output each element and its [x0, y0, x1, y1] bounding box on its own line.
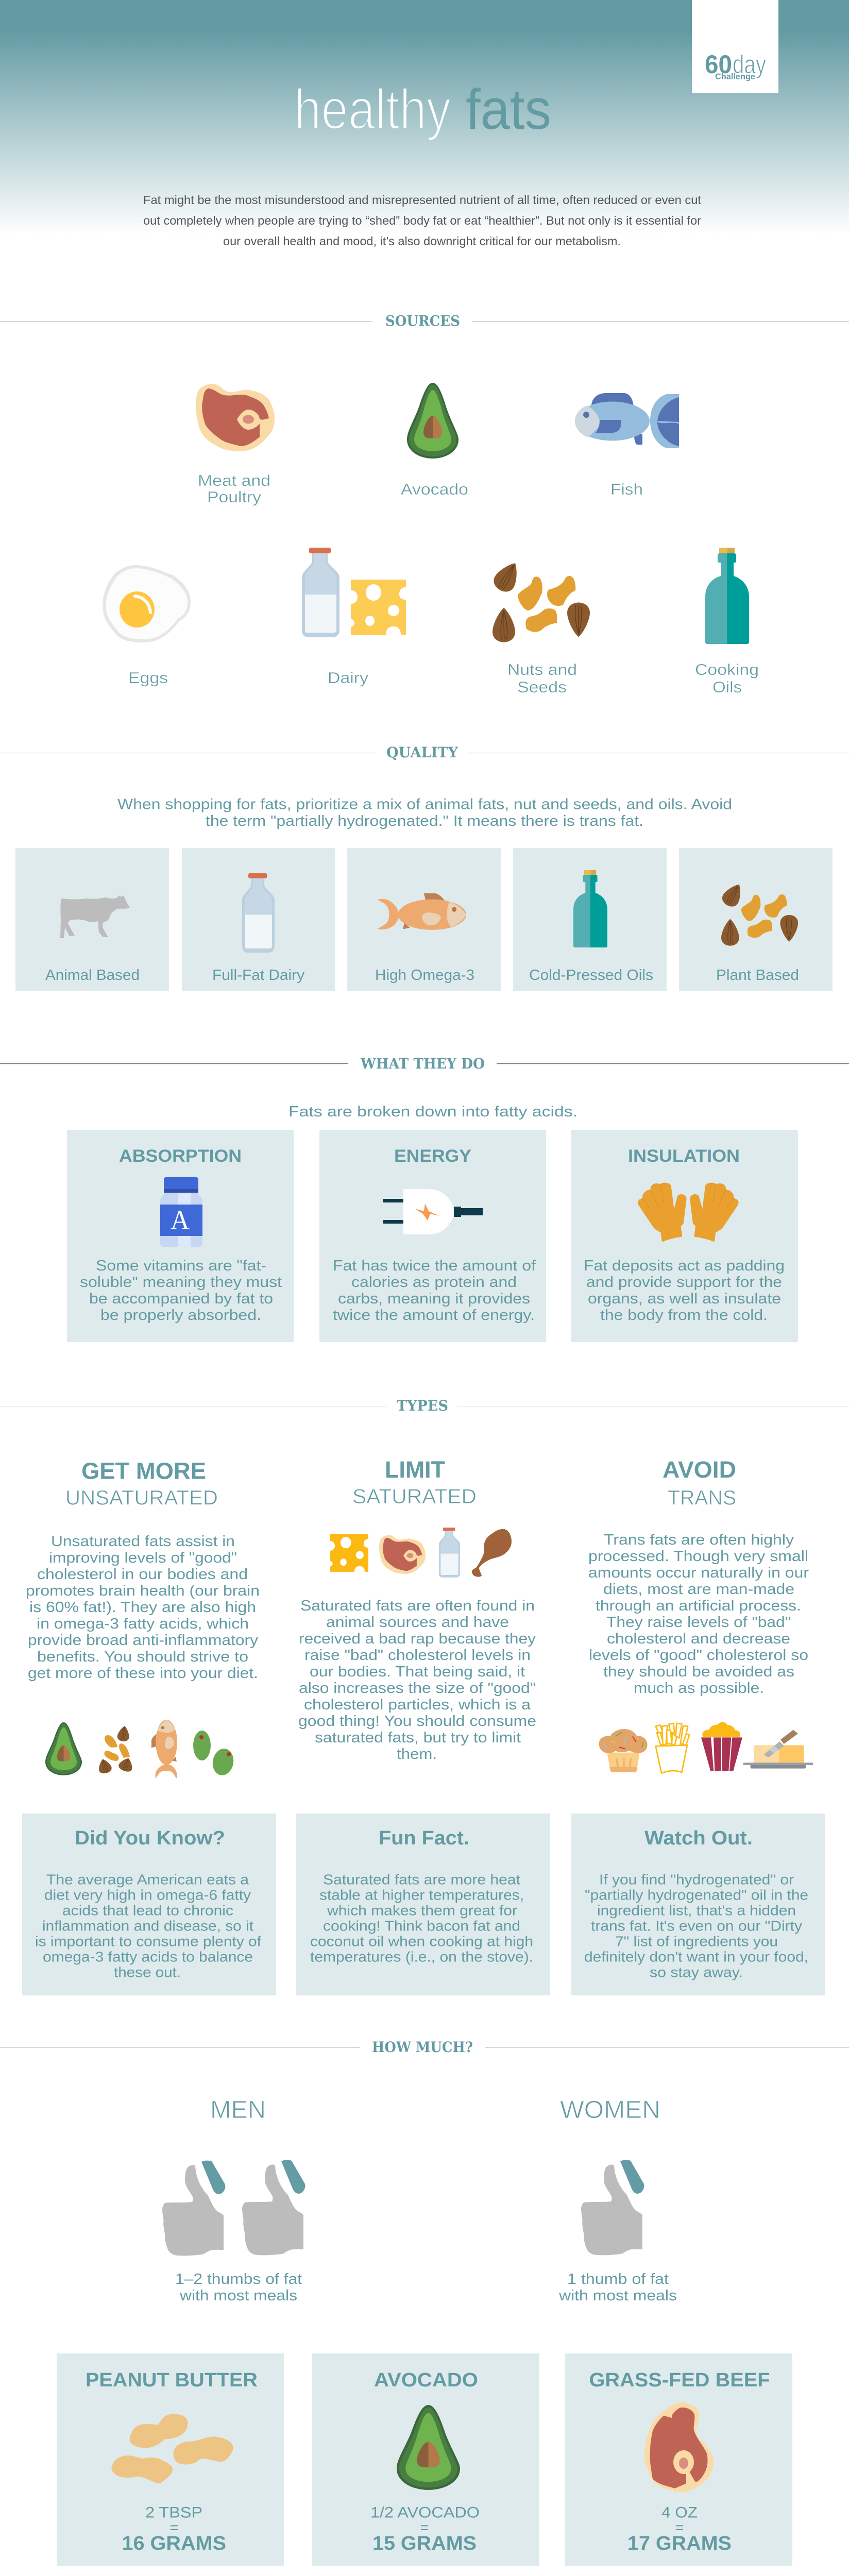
text: insulation: and provide support for the	[586, 1274, 782, 1291]
icon: avocado	[407, 383, 459, 459]
icon: egg	[103, 565, 191, 642]
quality intro text: When shopping for fats, prioritize a mix of animal fats, nut and seeds, and oils. Avoid	[117, 796, 732, 813]
icon: dairy	[302, 548, 406, 637]
label: meat and poultry	[198, 471, 270, 506]
text: saturated: cholesterol particles, which is a	[304, 1697, 531, 1713]
icon: vitamin bottle	[160, 1177, 202, 1247]
heading: watch out: Watch Out.	[644, 1827, 753, 1849]
text: did you know: omega-3 fatty acids to balance	[43, 1948, 253, 1965]
panel: plant based	[679, 848, 833, 991]
men column	[162, 2096, 305, 2304]
text: trans: diets, most are man-made	[603, 1581, 794, 1598]
women column	[558, 2096, 677, 2304]
section heading: sources: SOURCES	[385, 312, 460, 330]
text: saturated: our bodies. That being said, it	[310, 1664, 525, 1680]
icon: nuts and seeds	[490, 558, 590, 642]
text: saturated: saturated fats, but try to limit	[315, 1730, 521, 1746]
text: unsaturated: provide broad anti-inflammatory	[28, 1632, 259, 1649]
text: did you know: acids that lead to chronic	[62, 1902, 233, 1919]
label: cooking oils: Cooking	[695, 660, 759, 679]
icon: avocado	[397, 2405, 460, 2490]
column: avoid trans	[588, 1456, 813, 1773]
panel: full-fat dairy	[182, 848, 335, 991]
label: eggs: Eggs	[128, 669, 168, 687]
label: cold-pressed oils: Cold-Pressed Oils	[529, 967, 653, 984]
text: watch out: "partially hydrogenated" oil in the	[585, 1887, 808, 1903]
title: healthy	[294, 78, 451, 141]
heading: fun fact: Fun Fact.	[379, 1827, 469, 1849]
subheading: trans: TRANS	[668, 1487, 736, 1510]
text: did you know	[35, 1871, 261, 1980]
text: watch out: definitely don't want in your food,	[584, 1948, 808, 1965]
label: dairy: Dairy	[328, 669, 369, 687]
text: trans: they should be avoided as	[603, 1664, 794, 1680]
heading: limit: LIMIT	[385, 1456, 445, 1483]
icon: meat	[196, 384, 275, 451]
column: get more unsaturated	[26, 1458, 260, 1778]
text: unsaturated: in omega-3 fatty acids, which	[37, 1616, 249, 1632]
text: trans: Trans fats are often highly	[604, 1532, 794, 1548]
text: insulation: the body from the cold.	[600, 1307, 768, 1324]
icon: two thumbs	[162, 2160, 305, 2256]
header gradient background	[0, 0, 849, 234]
heading: men: MEN	[210, 2096, 266, 2124]
grams: 17 GRAMS	[627, 2533, 732, 2554]
icon: muffin	[599, 1729, 648, 1772]
intro text	[143, 193, 702, 248]
text: energy: calories as protein and	[351, 1274, 517, 1291]
icon: cooking oil	[705, 548, 749, 644]
logo: 60 day challenge: Challenge	[715, 72, 755, 81]
panel: avocado	[312, 2353, 539, 2566]
icon: nuts	[720, 880, 798, 946]
text: fun fact: stable at higher temperatures,	[319, 1887, 524, 1903]
text: saturated: animal sources and have	[326, 1614, 509, 1631]
panel: cold-pressed oils	[513, 848, 667, 991]
text: fun fact: cooking! Think bacon fat and	[323, 1918, 520, 1934]
text: unsaturated	[26, 1533, 260, 1682]
panel: peanut butter	[57, 2353, 284, 2566]
icons: trans fat foods	[599, 1722, 813, 1773]
amount: 2 TBSP	[145, 2504, 202, 2521]
text: trans: much as possible.	[634, 1680, 764, 1697]
text: did you know: The average American eats a	[46, 1871, 249, 1888]
text: watch out: so stay away.	[650, 1964, 743, 1980]
subheading: unsaturated: UNSATURATED	[65, 1487, 218, 1510]
label: cooking oils: Oils	[712, 678, 742, 696]
text: energy	[333, 1258, 536, 1324]
heading: avoid: AVOID	[663, 1456, 736, 1483]
text: saturated: also increases the size of "good"	[299, 1680, 536, 1697]
panel: sources	[103, 383, 759, 696]
intro text: out completely when people are trying to “shed” body fat or eat “healthier”. But not only is it essential for	[143, 214, 701, 227]
text: trans: processed. Though very small	[588, 1548, 808, 1565]
section heading: what they do: WHAT THEY DO	[360, 1055, 485, 1072]
icon: gloves	[638, 1183, 739, 1242]
what they do intro: Fats are broken down into fatty acids.	[288, 1104, 578, 1120]
icon: plug	[383, 1189, 483, 1234]
text: fun fact	[310, 1871, 533, 1965]
heading: grass-fed beef: GRASS-FED BEEF	[589, 2369, 770, 2391]
equals: =	[420, 2519, 429, 2536]
heading: women: WOMEN	[560, 2096, 660, 2124]
logo: 60 day challenge: 60	[705, 50, 732, 79]
text: fun fact: coconut oil when cooking at high	[310, 1933, 533, 1950]
text: women serving	[558, 2271, 677, 2304]
text: saturated: raise "bad" cholesterol levels in	[304, 1647, 531, 1664]
icon: olives	[193, 1731, 235, 1777]
quality intro text	[117, 796, 732, 829]
text: women serving: with most meals	[558, 2287, 677, 2304]
heading: energy: ENERGY	[394, 1146, 471, 1166]
text: saturated: Saturated fats are often found in	[300, 1598, 535, 1614]
title: fats	[466, 78, 551, 141]
heading: absorption: ABSORPTION	[119, 1146, 242, 1166]
icon: butter	[743, 1730, 813, 1769]
text: fun fact: temperatures (i.e., on the stove).	[310, 1948, 533, 1965]
text: energy: Fat has twice the amount of	[333, 1258, 536, 1274]
label: full-fat dairy: Full-Fat Dairy	[212, 967, 305, 984]
panel: did you know	[22, 1814, 276, 1995]
text: watch out: trans fat. It's even on our "Dirty	[591, 1918, 802, 1934]
icon: cow	[60, 895, 130, 938]
icon: nuts	[96, 1725, 135, 1775]
text: women serving: 1 thumb of fat	[567, 2271, 669, 2287]
text: trans: They raise levels of "bad"	[606, 1614, 791, 1631]
icon: orange fish	[377, 893, 466, 930]
text: insulation: organs, as well as insulate	[588, 1291, 781, 1307]
text: unsaturated: promotes brain health (our brain	[26, 1583, 260, 1599]
label: fish: Fish	[610, 480, 643, 498]
panel: insulation	[571, 1130, 798, 1342]
text: did you know: these out.	[114, 1964, 181, 1980]
section heading: quality: QUALITY	[386, 744, 459, 761]
icon: popcorn	[701, 1722, 742, 1771]
logo: 60 day challenge: day	[733, 50, 766, 79]
panel: grass-fed beef	[565, 2353, 792, 2566]
text: saturated	[298, 1598, 536, 1762]
text: watch out: 7" list of ingredients you	[615, 1933, 778, 1950]
text: absorption: Some vitamins are "fat-	[96, 1258, 266, 1274]
text: unsaturated: get more of these into your diet.	[28, 1665, 258, 1682]
equals: =	[675, 2519, 684, 2536]
text: insulation: Fat deposits act as padding	[584, 1258, 785, 1274]
icons: saturated foods	[330, 1528, 512, 1578]
label: high omega-3: High Omega-3	[375, 967, 474, 984]
text: unsaturated: Unsaturated fats assist in	[51, 1533, 235, 1550]
text: trans: levels of "good" cholesterol so	[589, 1647, 808, 1664]
text: watch out	[584, 1871, 808, 1980]
text: watch out: If you find "hydrogenated" or	[599, 1871, 794, 1888]
grams: 15 GRAMS	[372, 2533, 477, 2554]
text: energy: carbs, meaning it provides	[338, 1291, 530, 1307]
text: did you know: diet very high in omega-6 fatty	[44, 1887, 251, 1903]
text: unsaturated: is 60% fat!). They are also high	[29, 1599, 256, 1616]
icon: beef	[644, 2402, 714, 2492]
heading: peanut butter: PEANUT BUTTER	[86, 2369, 258, 2391]
grams: 16 GRAMS	[122, 2533, 226, 2554]
text: trans: through an artificial process.	[596, 1598, 801, 1614]
text: trans: amounts occur naturally in our	[588, 1565, 809, 1581]
logo: 60 day challenge	[692, 0, 778, 93]
panel: high omega-3	[347, 848, 501, 991]
quality intro text: the term "partially hydrogenated." It means there is trans fat.	[206, 813, 643, 829]
text: unsaturated: cholesterol in our bodies and	[37, 1566, 248, 1583]
label: animal based: Animal Based	[45, 967, 140, 984]
icon: vertical fish	[151, 1720, 177, 1778]
column: limit saturated	[298, 1456, 536, 1762]
text: absorption	[80, 1258, 282, 1324]
icon: avocado	[45, 1722, 82, 1775]
label: cooking oils	[695, 660, 759, 696]
text: did you know: inflammation and disease, so it	[42, 1918, 253, 1934]
amount: 1/2 AVOCADO	[370, 2504, 480, 2521]
text: trans: cholesterol and decrease	[607, 1631, 790, 1647]
icon: one thumb	[581, 2160, 644, 2255]
text: unsaturated: improving levels of "good"	[49, 1550, 237, 1566]
icon: fries	[656, 1723, 689, 1773]
text: did you know: is important to consume plenty of	[35, 1933, 261, 1950]
panel: fun fact	[296, 1814, 550, 1995]
panel: animal based	[15, 848, 169, 991]
text: saturated: them.	[397, 1746, 437, 1762]
icon: fish	[575, 393, 679, 448]
heading: get more: GET MORE	[81, 1458, 206, 1484]
label: meat and poultry: Poultry	[207, 488, 262, 506]
text: men serving: with most meals	[179, 2287, 297, 2304]
text: men serving	[175, 2271, 302, 2304]
text: watch out: ingredient list, that's a hidden	[597, 1902, 796, 1919]
text: fun fact: Saturated fats are more heat	[323, 1871, 520, 1888]
amount: 4 OZ	[661, 2504, 698, 2521]
text: unsaturated: benefits. You should strive to	[37, 1649, 248, 1665]
equals: =	[170, 2519, 178, 2536]
intro text: Fat might be the most misunderstood and misrepresented nutrient of all time, often reduced or even cut	[143, 193, 702, 207]
text: insulation	[584, 1258, 785, 1324]
text: absorption: be accompanied by fat to	[89, 1291, 273, 1307]
label: nuts and seeds: Nuts and	[507, 660, 577, 679]
text: saturated: good thing! You should consume	[298, 1713, 536, 1730]
text: absorption: be properly absorbed.	[100, 1307, 261, 1324]
icon: oil bottle	[573, 870, 607, 947]
heading: avocado: AVOCADO	[374, 2369, 478, 2391]
icon: vitamin bottle: A	[171, 1205, 190, 1235]
panel: absorption	[67, 1130, 294, 1342]
label: nuts and seeds	[507, 660, 577, 696]
text: saturated: received a bad rap because they	[299, 1631, 536, 1647]
label: nuts and seeds: Seeds	[517, 678, 567, 696]
section heading: how much: HOW MUCH?	[372, 2039, 473, 2056]
text: trans	[588, 1532, 809, 1697]
subheading: saturated: SATURATED	[352, 1485, 477, 1508]
label: plant based: Plant Based	[716, 967, 799, 984]
panel: watch out	[571, 1814, 825, 1995]
icon: peanuts	[111, 2414, 233, 2483]
label: avocado: Avocado	[401, 480, 468, 498]
text: fun fact: which makes them great for	[327, 1902, 517, 1919]
heading: did you know: Did You Know?	[75, 1827, 225, 1849]
intro text: our overall health and mood, it’s also downright critical for our metabolism.	[223, 234, 621, 248]
text: absorption: soluble" meaning they must	[80, 1274, 282, 1291]
panel: energy	[319, 1130, 546, 1342]
text: energy: twice the amount of energy.	[333, 1307, 535, 1324]
section heading: types: TYPES	[397, 1397, 448, 1414]
icon: milk bottle	[242, 873, 275, 953]
text: men serving: 1–2 thumbs of fat	[175, 2271, 302, 2287]
label: meat and poultry: Meat and	[198, 471, 270, 489]
heading: insulation: INSULATION	[628, 1146, 740, 1166]
